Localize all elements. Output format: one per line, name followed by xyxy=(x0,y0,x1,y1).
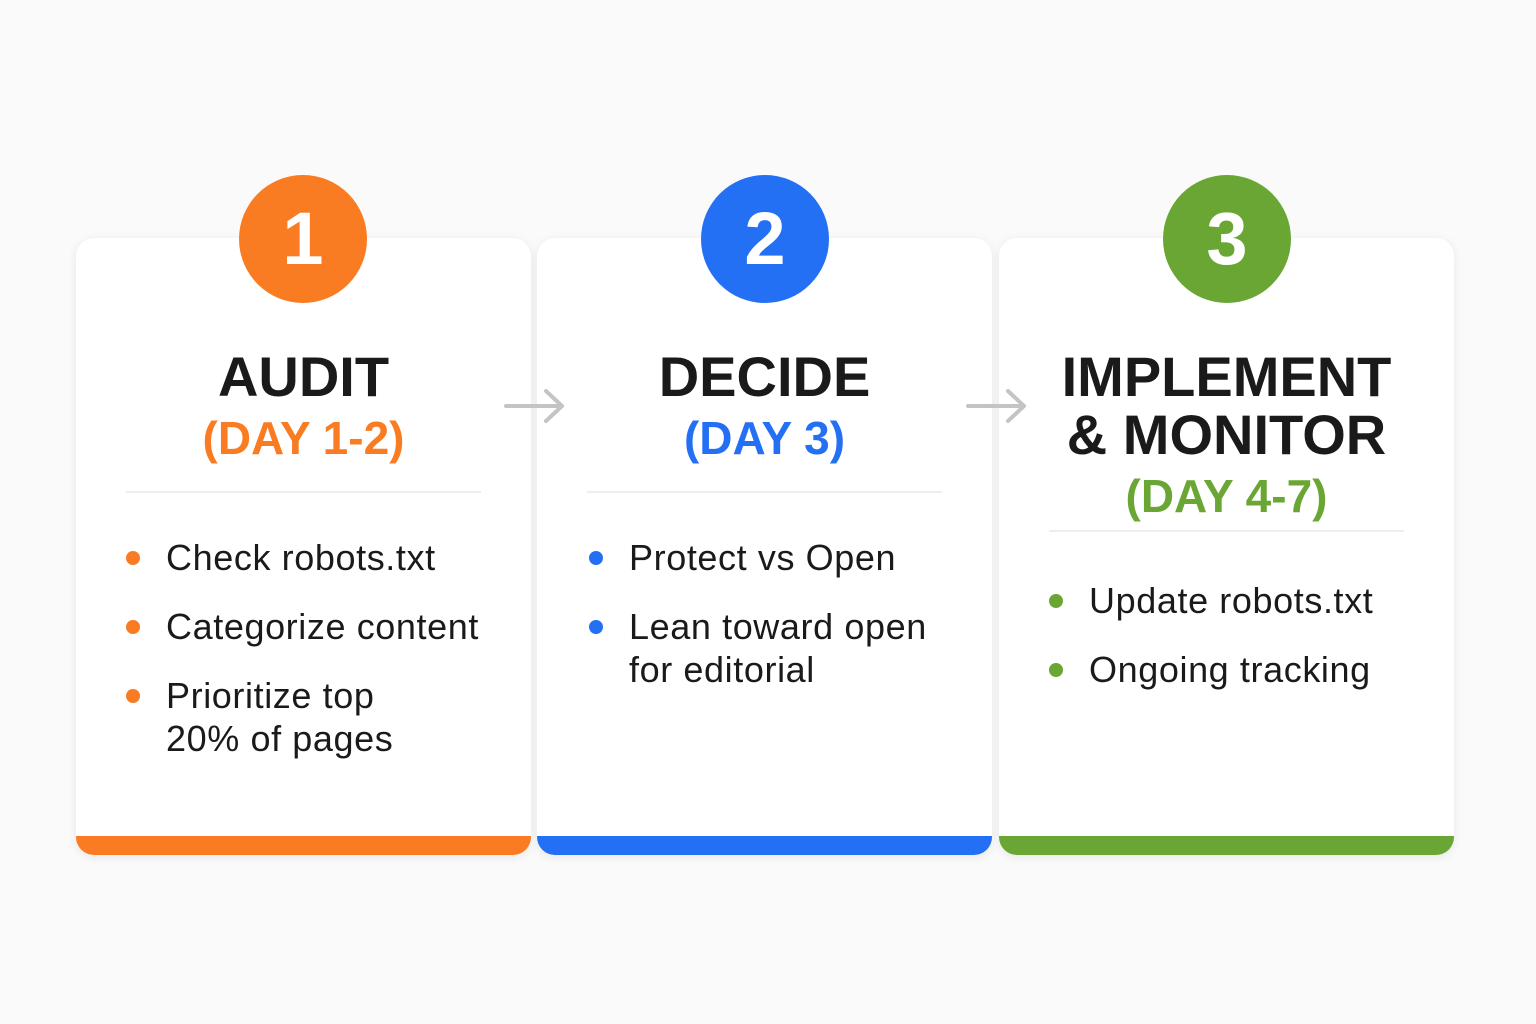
list: audit tasks: 20% of pages xyxy=(166,718,393,759)
list: audit tasks xyxy=(126,537,479,759)
list: decide tasks: Protect vs Open xyxy=(629,537,896,578)
heading: decide: (DAY 3) xyxy=(684,412,845,464)
list: audit tasks: Check robots.txt xyxy=(166,537,436,578)
heading: decide: DECIDE xyxy=(659,345,870,408)
icon: circle 1 xyxy=(239,175,367,303)
list: implement tasks: Update robots.txt xyxy=(1089,580,1373,621)
icon: circle 1: 1 xyxy=(282,197,324,280)
list: implement tasks xyxy=(1049,580,1373,690)
list: decide tasks: for editorial xyxy=(629,649,815,690)
icon: circle 3 xyxy=(1163,175,1291,303)
card: audit xyxy=(76,238,531,855)
icon: circle 2 xyxy=(701,175,829,303)
arrow 2 xyxy=(966,388,1026,424)
card: implement xyxy=(999,238,1454,855)
heading: audit xyxy=(203,345,404,464)
card: decide xyxy=(537,238,992,855)
icon: circle 3: 3 xyxy=(1206,197,1248,280)
heading: decide xyxy=(659,345,870,464)
heading: audit: (DAY 1-2) xyxy=(203,412,404,464)
list: audit tasks: Categorize content xyxy=(166,606,479,647)
icon: circle 2: 2 xyxy=(744,197,786,280)
heading: implement: & MONITOR xyxy=(1067,403,1386,466)
arrow 1 xyxy=(504,388,564,424)
heading: implement: IMPLEMENT xyxy=(1062,345,1391,408)
heading: implement xyxy=(1062,345,1391,522)
heading: audit: AUDIT xyxy=(218,345,389,408)
list: audit tasks: Prioritize top xyxy=(166,675,374,716)
list: decide tasks xyxy=(589,537,927,690)
list: decide tasks: Lean toward open xyxy=(629,606,927,647)
list: implement tasks: Ongoing tracking xyxy=(1089,649,1371,690)
heading: implement: (DAY 4-7) xyxy=(1126,470,1327,522)
